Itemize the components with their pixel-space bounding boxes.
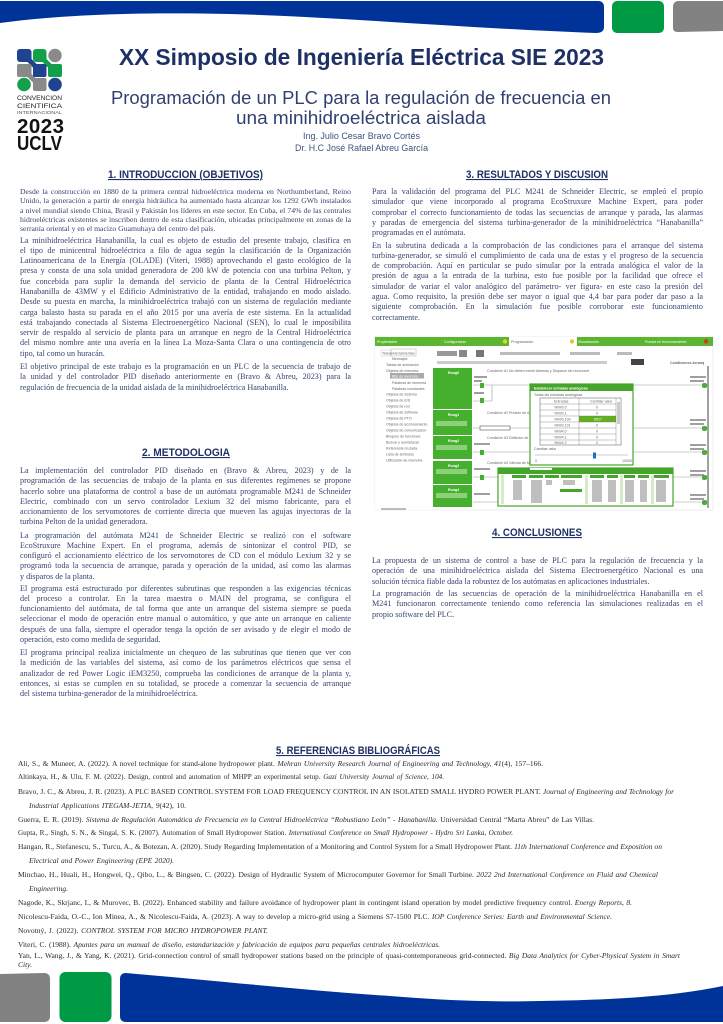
reference list [18, 759, 680, 969]
left tool tree: Objetos de comunicación [386, 428, 426, 432]
dialog: establecer entradas analógicas: 6517 [594, 418, 602, 422]
text: conclusiones paragraph 1: La propuesta de un sistema de control a base de PLC para la regulación de frecuencia y la [372, 556, 703, 565]
text: resultados paragraph 1 [372, 187, 703, 237]
dialog: establecer entradas analógicas: 0 [596, 436, 598, 440]
tab bar: Configuración [444, 340, 466, 344]
left tool tree: Bits de memoria [392, 374, 418, 378]
logo wording: INTERNACIONAL [17, 110, 63, 115]
left tool tree: Lista de símbolos [386, 452, 414, 456]
dialog: establecer entradas analógicas: 0 [596, 406, 598, 410]
text: metodología paragraph 3: del proceso a controlar. En la tarea maestra o MAIN del programa, se configura el [20, 594, 351, 603]
text: intro paragraph 2: servir de respaldo al servicio de planta para un arranque en negro de la Central Hidroeléctrica [20, 328, 351, 337]
dialog: establecer entradas analógicas: %IW0.100 [554, 418, 571, 422]
left tool tree: Referencia cruzada [386, 446, 417, 450]
bottom banner: gray and green blocks with blue wave [0, 972, 723, 1022]
heading: referencias: 5. REFERENCIAS BIBLIOGRÁFICAS [276, 744, 440, 757]
top banner: blue wave with green and gray blocks [0, 1, 723, 33]
reference list: Yan, L., Wang, J., & Yang, K. (2021). Grid-connection control of small hydropower stations based on the principle of quasi-contemporaneous grid-connected. Big Data Analytics for Cyber-Physical System in Smart [18, 951, 680, 960]
text: metodología paragraph 1: La implementación del controlador PID diseñado en (Bravo & Abreu, 2023) y de la [20, 466, 351, 475]
text: conclusiones paragraph 1: solución técnica fiable dada la robustez de los autómatas en aplicaciones industriales. [372, 577, 650, 586]
reference list: Engineering. [29, 884, 68, 893]
reference list: Viteri, C. (1988). Apuntes para un manual de diseño, estandarización y fabricación de equipos para pequeñas centrales hidroeléctricas. [18, 940, 440, 949]
left tool tree [375, 346, 432, 510]
dialog: establecer entradas analógicas: Cambiar valor [590, 400, 613, 404]
text: resultados paragraph 1: Para la validación del programa del PLC M241 de Schneider Electric, se empleó el propio [372, 187, 703, 196]
text: metodología paragraph 4: El programa principal realiza inicialmente un chequeo de las subrutinas que tienen que ver con [20, 648, 351, 657]
figure: PLC simulator screenshot: Condición #3 Deflector de Ch [487, 436, 534, 440]
text: metodología paragraph 1 [20, 466, 351, 526]
dialog: establecer entradas analógicas: 0 [535, 459, 537, 463]
left tool tree: Herramientas [393, 352, 415, 356]
text: resultados paragraph 1: comprobar el correcto funcionamiento de todas las secuencias de arranque y parada, las alarmas [372, 208, 703, 217]
text: intro paragraph 3: la unidad y del controlador PID diseñado anteriormente en (Bravo & Abreu, 2023) para la [20, 372, 351, 381]
text: metodología paragraph 2: configuró el accionamiento eléctrico de los servomotores de CD con el módulo Lexium 32 y se [20, 551, 351, 560]
text: metodología paragraph 3: operación, esto como medida de seguridad. [20, 635, 161, 644]
dialog: establecer entradas analógicas: %IW4.0 [554, 430, 567, 434]
text: intro paragraph 2: carga balasto hasta su parada en el año 2015 por una avería de este sistema. En la actualidad [20, 308, 351, 317]
text: conclusiones paragraph 2 [372, 589, 703, 619]
dialog: establecer entradas analógicas: 10000 [622, 459, 632, 463]
subtitle: Programación de un PLC para la regulación de frecuencia en [111, 88, 611, 108]
toolbar [437, 350, 704, 365]
text: resultados paragraph 1: simulador que viene incorporado al programa EcoStruxure Machine Expert, para poder [372, 197, 703, 206]
text: metodología paragraph 1: accionamiento de los servomotores de corriente directa que mueven las agujas inyectoras de la [20, 507, 351, 516]
dialog: establecer entradas analógicas: Todas las entradas analógicas [534, 393, 583, 397]
text: metodología paragraph 1: hacerlo sobre una plataforma de control a base de un autómata programable M241 de Schneider [20, 487, 351, 496]
panel: 5. referencias bibliográficas [18, 744, 680, 969]
main title: XX Simposio de Ingeniería Eléctrica SIE 2023 [119, 44, 604, 70]
text: metodología paragraph 2 [20, 530, 351, 581]
text: resultados paragraph 2: presión de agua a la entrada de la turbina, esto fue posible por la facilidad que ofrece el [372, 271, 703, 280]
title block [111, 44, 611, 153]
text: metodología paragraph 1: Electric, combinado con un servo controlador Lexium 32 del mismo fabricante, para el [20, 497, 351, 506]
toolbar: Condiciones Arranq [670, 361, 704, 365]
tab bar: Propiedades [377, 340, 397, 344]
dialog: establecer entradas analógicas: Entradas [554, 400, 569, 404]
figure: PLC simulator screenshot: Condición #4 Válvula de Man [487, 461, 534, 465]
reference list: Altinkaya, H., & Ulu, F. M. (2022). Design, control and automation of MHPP an experimental setup. Gazi University Journal of Science, 104. [18, 772, 444, 780]
authors [295, 131, 428, 153]
logo wording: CONVENCION [17, 95, 62, 102]
text: resultados paragraph 2 [372, 240, 703, 322]
heading: introducción: 1. INTRODUCCION (OBJETIVOS) [108, 169, 263, 181]
text: metodología paragraph 2: y disparos de la planta. [20, 572, 95, 581]
left tool tree: Objetos de sistema [386, 392, 417, 396]
text: conclusiones paragraph 2: M241 funcionaron correctamente teniendo como referencia las simulaciones realizadas en el [372, 599, 703, 608]
text: resultados paragraph 2: correctamente. [372, 313, 420, 322]
reference list: Minchao, H., Huali, H., Hongwei, Q., Qibo, L., & Bingsen, C. (2022). Design of Hydraulic System of Microcomputer Governor for Small Turbine. 2022 2nd International Conference on Fluid and Chemical [18, 870, 658, 879]
text: intro paragraph 1: Unido, la generación a partir de energía hidráulica ha aumentado hasta alcanzar los 1292 GWh instalados [20, 196, 351, 205]
left tool tree: Objetos de red [386, 404, 410, 408]
text: intro paragraph 2: fue concebida para suplir la demanda del servicio de planta de la Central Hidroeléctrica [20, 277, 351, 286]
text: metodología paragraph 1: programación de las secuencias de trabajo de la planta en sus diferentes regímenes se propone [20, 476, 351, 485]
text: metodología paragraph 4: del sistema turbina-generador de la minihidroeléctrica. [20, 689, 198, 698]
text: intro paragraph 2: Hanabanilla de 43MW y el Edificio Administrativo de la entidad, trabajando en modo aislado. [20, 287, 351, 296]
logo wording: UCLV [17, 132, 62, 155]
figure: PLC simulator screenshot: Condición #2 Presión de Agua [487, 411, 535, 415]
text: intro paragraph 1: Desde la construcción en 1880 de la primera central hidroeléctrica moderna en Northumberland, Reino [20, 187, 351, 196]
ladder rungs column: Rung2 [448, 439, 459, 443]
reference list: Novotný, J. (2022). CONTROL SYSTEM FOR MICRO HYDROPOWER PLANT. [18, 926, 268, 935]
text: intro paragraph 3: El objetivo principal de este trabajo es la programación en un PLC de la secuencia de trabajo de [20, 362, 351, 371]
left tool tree: Utilización de memoria [386, 458, 422, 462]
text: metodología paragraph 4: entonces, si estas se cumplen en su totalidad, se procede a comenzar la secuencia de arranque [20, 679, 351, 688]
heading: metodología: 2. METODOLOGIA [142, 447, 230, 459]
text: metodología paragraph 2: EcoStruxure Machine Expert. En el programa, además de sintonizar el control PID, se [20, 541, 351, 550]
text: resultados paragraph 2: agua. Como requisito, la presión debe ser mayor o igual que 4,4 bar para poder dar paso a la [372, 292, 703, 301]
reference list: Guerra, E. R. (2019). Sistema de Regulación Automática de Frecuencia en la Central Hidroeléctrica “Robustiano León” - Hanabanilla. Universidad Central “Marta Abreu” de Las Villas. [18, 814, 594, 824]
text: metodología paragraph 3: seleccionar el modo de operación entre manual o automático, y que ante un arranque en caliente [20, 614, 351, 623]
ladder rungs column: Rung0 [448, 371, 459, 375]
figure: PLC simulator screenshot: Condición #1 No deben existir Alarmas y Disparos sin reconocer [487, 369, 590, 373]
text: resultados paragraph 2: turbina-generador, se simuló el cumplimiento de cada una de estas y el progreso de la secuencia [372, 251, 703, 260]
ladder rungs column: Rung1 [448, 413, 459, 417]
text: metodología paragraph 4 [20, 648, 351, 698]
left tool tree: Objetos de software [386, 410, 418, 414]
reference list: Ali, S., & Muneer, A. (2022). A novel technique for stand-alone hydropower plant. Mehran University Research Journal of Engineering and Technology, 41(4), 157–166. [18, 759, 543, 768]
text: metodología paragraph 3: El programa está estructurado por diferentes subrutinas que responden a las exigencias técnicas [20, 584, 351, 592]
dialog: establecer entradas analógicas: %IW0.1 [554, 412, 567, 416]
left tool tree: Buscar y reemplazar [386, 440, 420, 444]
text: metodología paragraph 1: turbina Pelton de la unidad generadora. [20, 517, 148, 526]
logo mark: colored blocks [17, 49, 62, 91]
text: metodología paragraph 3: funcionamiento del autómata, de tal forma que ante un arranque del sistema siempre se pueda [20, 604, 351, 613]
text: metodología paragraph 3: después de una falla, siempre el operador tenga la opción de ser avisado y de elegir el modo de [20, 625, 351, 634]
text: intro paragraph 2: La minihidroeléctrica Hanabanilla, la cual es objeto de estudio del presente trabajo, clasifica en [20, 236, 351, 244]
dialog: establecer entradas analógicas: Cambiar valor [534, 447, 557, 451]
dialog: establecer entradas analógicas: %IW4.1 [554, 436, 567, 440]
text: metodología paragraph 3 [20, 584, 351, 644]
left tool tree: Palabras constantes [392, 387, 425, 391]
left tool tree: Bloques de funciones [386, 434, 421, 438]
subtitle [111, 88, 611, 128]
left tool tree: Palabras de memoria [392, 381, 426, 385]
logo wording [17, 95, 64, 155]
left tool tree: Objetos de PTO [386, 416, 412, 420]
dialog: establecer entradas analógicas: %IW0.0 [554, 406, 567, 410]
text: resultados paragraph 2: siguiente comprobación. En la simulación fue posible corroborar este funcionamiento [372, 302, 703, 311]
reference list: Nicolescu-Faida, O.-C., Ion Minea, A., & Nicolescu-Faida, A. (2023). A way to develop a micro-grid using a Siemens S7-1500 PLC. IOP Conference Series: Earth and Environmental Science. [18, 912, 612, 921]
text: resultados paragraph 2: En la subrutina dedicada a la comprobación de las condiciones para el arranque del sistema [372, 240, 703, 250]
text: conclusiones paragraph 2: La programación de las secuencias de operación de la minihidroeléctrica Hanabanilla en el [372, 589, 703, 598]
authors: Dr. H.C José Rafael Abreu García [295, 143, 428, 153]
dialog: establecer entradas analógicas: Establecer entradas analógicas [534, 386, 588, 390]
reference list: Industrial Applications ITEGAM-JETIA, 9(42), 10. [29, 801, 186, 810]
text: conclusiones paragraph 1: operación de una minihidroeléctrica aislada del Sistema Electroenergético Nacional es una [372, 566, 703, 575]
text: conclusiones paragraph 2: propio software del PLC. [372, 610, 454, 619]
ladder rungs column: Rung4 [448, 488, 459, 492]
text: metodología paragraph 4: la medición de las variables del sistema, así como de los parámetros eléctricos que sensa el [20, 658, 351, 667]
logo wording: CIENTIFICA [17, 103, 63, 110]
dialog: establecer entradas analógicas: 0 [596, 412, 598, 416]
panel: 2. metodología [20, 447, 351, 698]
text: intro paragraph 2: tipo, tal como un huracán. [20, 349, 105, 358]
tab bar [375, 337, 713, 346]
tab bar: Visualización [578, 340, 599, 344]
reference list: Gupta, R., Singh, S. N., & Singal, S. K. (2007). Automation of Small Hydropower Station. International Conference on Small Hydropower - Hydro Sri Lanka, October. [18, 828, 513, 836]
figure: PLC simulator screenshot [374, 336, 714, 510]
text: metodología paragraph 4: analizador de red Power Logic iEM3250, comprueba las condiciones de arranque de la planta y, [20, 669, 351, 678]
text: resultados paragraph 1: programadas en el autómata. [372, 228, 465, 237]
logo wording: 2023 [17, 115, 64, 138]
text: metodología paragraph 2: La programación del autómata M241 de Schneider Electric se realizó con el software [20, 530, 351, 540]
text: intro paragraph 2: está trabajando conectada al Sistema Electroenergético Nacional (SEN), lo cual le imposibilita [20, 318, 351, 327]
text: resultados paragraph 2: de comprobación. Aquí en particular se pudo simular por la entrada analógica el valor de la [372, 261, 703, 270]
text: intro paragraph 1: hidroeléctricas existentes se inscriben dentro de esta clasificación, ubicadas principalmente en zonas de la [20, 215, 351, 224]
dialog: establecer entradas analógicas: 0 [596, 430, 598, 434]
panel: simulator inputs and outputs [498, 468, 673, 506]
text: intro paragraph 2: del mismo nombre ante una avería en la línea La Moza-Santa Clara o una contingencia de otro [20, 338, 351, 347]
left tool tree: Objetos de accionamiento [386, 422, 428, 426]
text: intro paragraph 2 [20, 236, 351, 358]
heading: resultados: 3. RESULTADOS Y DISCUSION [466, 169, 608, 181]
text: intro paragraph 1 [20, 187, 351, 233]
panel: 3. resultados y discusión [372, 169, 703, 322]
authors: Ing. Julio Cesar Bravo Cortés [303, 131, 420, 141]
ladder rungs column [433, 368, 472, 507]
text: intro paragraph 2: Latinoamericana de la Energía (OLADE) (Viteri, 1988) aprovechando el gasto ecológico de la [20, 256, 351, 265]
tab bar: Programación [511, 340, 533, 344]
text: intro paragraph 3 [20, 362, 351, 392]
ladder diagram lines [473, 366, 708, 508]
subtitle: una minihidroeléctrica aislada [236, 108, 487, 128]
text: intro paragraph 2: el tipo de minicentral hidroeléctrica a filo de agua según la clasificación de la Organización [20, 246, 351, 255]
reference list: Bravo, J. C., & Abreu, J. R. (2023). A PLC BASED CONTROL SYSTEM FOR LOAD FREQUENCY CONTROL IN AN ISOLATED SMALL HYDRO POWER PLANT. Journal of Engineering and Technology for [18, 787, 674, 796]
panel: 4. conclusiones [372, 527, 703, 619]
tab bar: Puesta en funcionamiento [645, 340, 687, 344]
dialog: establecer entradas analógicas: %IW0.101 [554, 424, 571, 428]
text: resultados paragraph 1: y paradas de emergencia del sistema turbina-generador de la minihidroeléctrica “Hanabanilla” [372, 218, 703, 227]
left tool tree: Objetos de memoria [386, 369, 418, 373]
left tool tree: Tareas [382, 352, 393, 356]
text: intro paragraph 3: regulación de frecuencia de la unidad aislada de la minihidroeléctrica Hanabanilla. [20, 383, 289, 392]
text: resultados paragraph 2: simulador de variar el valor analógico del parámetro- ver figura- en este caso la presión del [372, 282, 703, 291]
dialog: establecer entradas analógicas: 0 [596, 441, 598, 445]
text: intro paragraph 1: a nivel mundial siendo China, Brasil y Pakistán los líderes en este sector. En Cuba, el 74% de las centrales [20, 206, 351, 215]
heading: conclusiones: 4. CONCLUSIONES [492, 527, 582, 539]
left tool tree: Mensajes [392, 357, 408, 361]
text: metodología paragraph 2: programó toda la secuencia de arranque, parada y operación de la unidad, así como las alarmas [20, 561, 351, 570]
text: intro paragraph 1: serranía oriental y en el macizo Guamuhaya del centro del país. [20, 224, 215, 233]
panel: 1. introducción [20, 169, 351, 392]
dialog: establecer entradas analógicas: %IW4.2 [554, 441, 567, 445]
logo: Convención Científica Internacional 2023 UCLV [17, 48, 64, 155]
text: intro paragraph 2: presa y consta de una sola unidad generadora de 200 kW de potencia con una turbina Pelton, y [20, 266, 351, 275]
ladder rungs column: Rung3 [448, 464, 459, 468]
dialog: establecer entradas analógicas: 0 [596, 424, 598, 428]
left tool tree: Objetos de E/S [386, 398, 411, 402]
dialog: establecer entradas analógicas [530, 384, 633, 465]
text: conclusiones paragraph 1 [372, 556, 703, 586]
reference list: Electrical and Power Engineering (EPE 2020). [29, 856, 174, 865]
left tool tree: Tablas de animación [386, 363, 419, 367]
reference list: Nagode, K., Skrjanc, I., & Murovec, B. (2022). Enhanced stability and failure avoidance of hydropower plant in contingent island operation by model predictive frequency control. Energy Reports, 8. [18, 898, 632, 907]
text: intro paragraph 2: Desde su puesta en marcha, la minihidroeléctrica trabajó con un sistema de regulación mediante [20, 297, 351, 306]
reference list: Hangan, R., Stefanescu, S., Turcu, A., & Botezan, A. (2020). Study Regarding Implementation of a Monitoring and Control System for a Small Hydropower Plant. 11th International Conference and Exposition on [18, 842, 662, 851]
reference list: City. [18, 960, 32, 969]
